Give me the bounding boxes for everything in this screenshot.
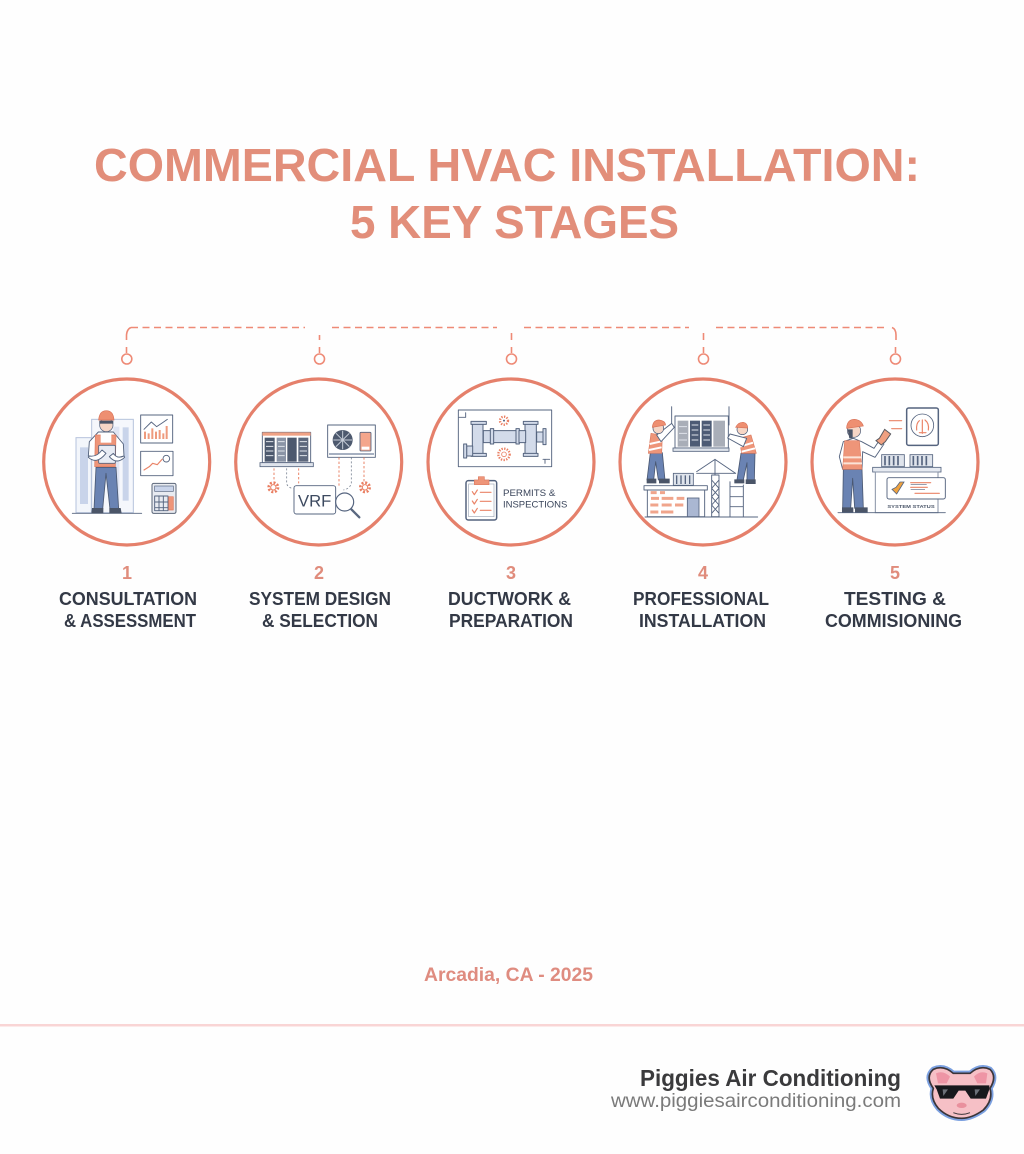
ladder: [730, 482, 743, 517]
icon: pig logo: [929, 1068, 994, 1118]
permits text: INSPECTIONS: [503, 500, 567, 510]
label 5: TESTING &: [844, 589, 946, 609]
label 1: & ASSESSMENT: [64, 611, 196, 631]
label 2: SYSTEM DESIGN: [249, 589, 391, 609]
footer brand: Piggies Air Conditioning: [640, 1065, 901, 1091]
label 3: DUCTWORK &: [448, 589, 571, 609]
label 4: [633, 589, 769, 631]
VRF text: VRF: [298, 492, 331, 511]
left worker: [647, 453, 665, 480]
stage number 4: 4: [698, 563, 708, 583]
clipboard: [466, 481, 497, 520]
circle 2: [236, 379, 402, 545]
label 1: [59, 589, 197, 631]
label 4: PROFESSIONAL: [633, 589, 769, 609]
footer divider: [0, 1024, 1024, 1026]
stage 4: professional installation: [620, 379, 786, 631]
stage 2: system design and selection: [236, 379, 402, 631]
label 3: [448, 589, 573, 631]
building: [647, 489, 705, 517]
stage number 5: 5: [890, 563, 900, 583]
stage number 1: 1: [122, 563, 132, 583]
circle 5: [812, 379, 978, 545]
permits text: [503, 488, 567, 510]
right worker: [737, 453, 755, 480]
circle 1: [44, 379, 210, 545]
stage number 3: 3: [506, 563, 516, 583]
icon: engineer with charts: [72, 411, 176, 513]
stage 1: consultation and assessment: [44, 379, 210, 631]
desk with units: [882, 455, 904, 467]
dashed connector: [122, 328, 901, 364]
crane: [712, 475, 719, 517]
title: [94, 139, 920, 248]
circle 4: [620, 379, 786, 545]
icon: workers installing unit: [644, 407, 758, 517]
stage 5: testing and commissioning: [812, 379, 978, 631]
title: 5 KEY STAGES: [350, 196, 679, 248]
label 2: [249, 589, 391, 631]
icon: blueprint and permits: [458, 410, 567, 520]
footer brand: [610, 1065, 901, 1112]
label 1: CONSULTATION: [59, 589, 197, 609]
label 4: INSTALLATION: [639, 611, 766, 631]
label 2: & SELECTION: [262, 611, 378, 631]
label 5: [825, 589, 962, 631]
label 5: COMMISIONING: [825, 611, 962, 631]
permits text: PERMITS &: [503, 488, 555, 498]
circle 3: [428, 379, 594, 545]
footer brand: www.piggiesairconditioning.com: [610, 1090, 901, 1112]
stage number 2: 2: [314, 563, 324, 583]
icon: technician testing: [838, 408, 945, 513]
label 3: PREPARATION: [449, 611, 573, 631]
location and year: Arcadia, CA - 2025: [424, 965, 593, 986]
title: COMMERCIAL HVAC INSTALLATION:: [94, 139, 920, 191]
stage 3: ductwork and preparation: [428, 379, 594, 631]
desk caption: SYSTEM STATUS: [887, 504, 935, 509]
icon: VRF units: [260, 425, 375, 517]
